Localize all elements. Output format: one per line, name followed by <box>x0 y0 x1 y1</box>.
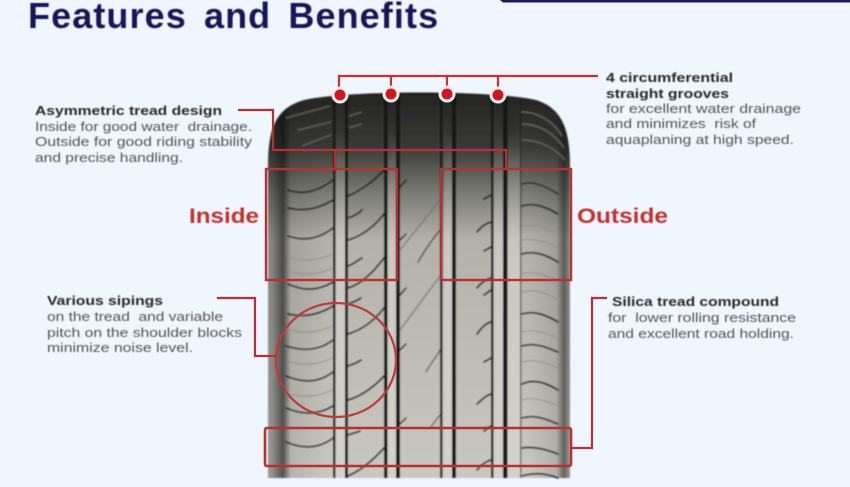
label: outside: Outside <box>577 205 668 228</box>
groove markers <box>332 86 506 104</box>
decorative top rule <box>500 0 850 2</box>
text block: silica tread compound: Silica tread compound <box>612 295 779 309</box>
text block: silica tread compound: for lower rolling resistance <box>608 311 796 325</box>
text block: silica tread compound <box>608 295 796 341</box>
inner left block <box>348 170 384 196</box>
text block: circumferential grooves: and minimizes risk of <box>606 117 757 131</box>
faint siping lines on shoulder blocks <box>290 225 558 406</box>
text block: silica tread compound: and excellent road holding. <box>608 327 794 341</box>
text block: asymmetric tread design: and precise handling. <box>35 151 183 165</box>
label: inside: Inside <box>189 205 259 228</box>
silica band highlight <box>265 428 571 466</box>
text block: various sipings: Various sipings <box>47 294 163 308</box>
sipings leader line <box>217 298 276 356</box>
asymmetric tread leader line <box>238 110 506 168</box>
text block: circumferential grooves: 4 circumferential <box>606 71 733 85</box>
left shoulder <box>288 180 333 192</box>
tread sipes <box>286 170 558 478</box>
light lines at top of tread <box>286 106 565 330</box>
text block: asymmetric tread design: Outside for good riding stability <box>35 135 253 149</box>
inside highlight box <box>266 169 397 280</box>
center rib notches <box>400 180 406 187</box>
text block: asymmetric tread design: Asymmetric tread design <box>35 104 222 118</box>
groove ribs <box>336 130 520 478</box>
text block: circumferential grooves: straight grooves <box>606 87 729 101</box>
text block: various sipings: pitch on the shoulder blocks <box>47 326 242 340</box>
text block: circumferential grooves <box>606 71 801 147</box>
callout marker lines: grooves <box>339 76 598 95</box>
tire illustration <box>268 92 570 478</box>
text block: circumferential grooves: for excellent water drainage <box>606 102 801 116</box>
text block: various sipings: minimize noise level. <box>47 341 193 355</box>
text block: circumferential grooves: aquaplaning at high speed. <box>606 133 794 147</box>
circumferential grooves <box>333 96 522 478</box>
text block: various sipings: on the tread and variable <box>47 310 223 324</box>
text block: various sipings <box>47 294 242 355</box>
right shoulder <box>522 183 558 194</box>
outside highlight box <box>441 169 571 280</box>
sipings circle highlight <box>276 303 396 417</box>
text block: asymmetric tread design: Inside for good water drainage. <box>35 120 252 134</box>
silica leader line <box>571 298 607 448</box>
text block: asymmetric tread design <box>35 104 253 165</box>
right rib notches <box>484 195 491 199</box>
